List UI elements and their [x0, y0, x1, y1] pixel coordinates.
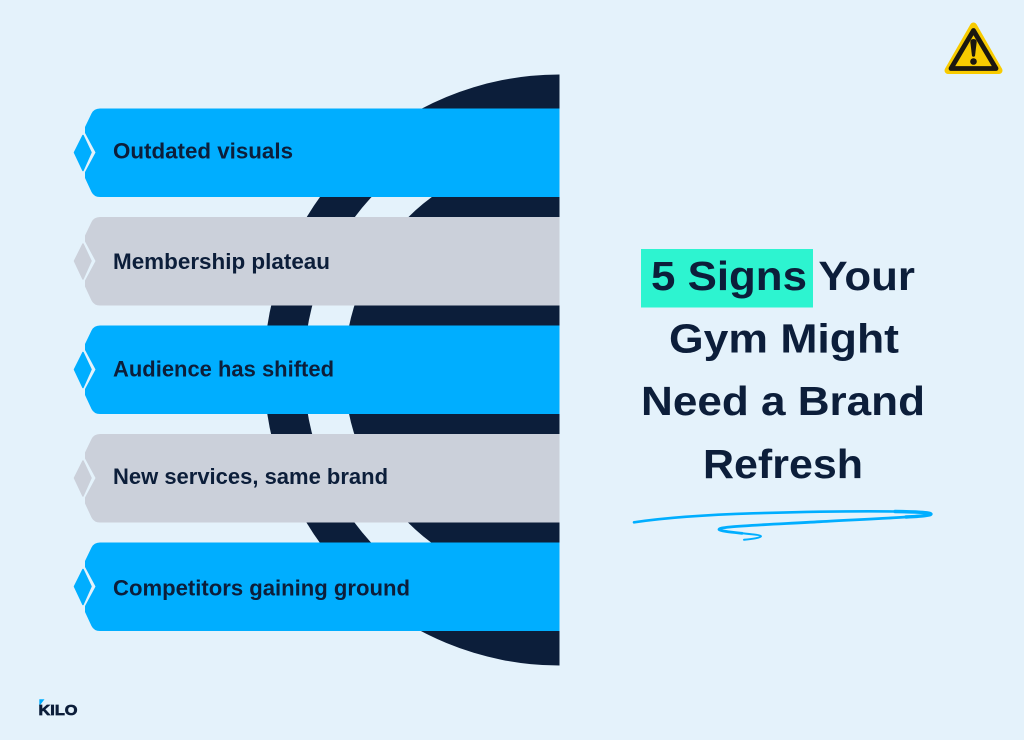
- sign 5: competitors gaining ground: [74, 542, 560, 631]
- title: 5 signs your gym might need a brand refresh: Refresh: [703, 441, 863, 487]
- sign 1: outdated visuals: [74, 108, 560, 197]
- sign 3: audience has shifted: [74, 326, 560, 414]
- sign 3: audience has shifted: Audience has shifted: [113, 356, 334, 382]
- title: 5 signs your gym might need a brand refresh: Gym Might: [669, 316, 899, 362]
- highlight behind 5 Signs: [641, 249, 813, 308]
- icon: warning triangle: [948, 26, 999, 70]
- sign 5: competitors gaining ground: Competitors gaining ground: [113, 576, 410, 600]
- sign 1: outdated visuals: Outdated visuals: [113, 138, 293, 164]
- title: 5 signs your gym might need a brand refresh: Need a Brand: [641, 378, 925, 424]
- sign 2: membership plateau: [74, 217, 560, 306]
- logo: KILO: KILO: [38, 702, 78, 719]
- sign 4: new services, same brand: [74, 434, 560, 522]
- title: 5 signs your gym might need a brand refresh: [641, 249, 925, 487]
- title: 5 signs your gym might need a brand refresh: 5 Signs Your: [651, 253, 915, 299]
- concentric semicircle graphic: [264, 74, 560, 666]
- sign 2: membership plateau: Membership plateau: [113, 249, 330, 274]
- hand-drawn underline squiggle: [634, 511, 931, 540]
- sign 4: new services, same brand: New services, same brand: [113, 464, 388, 489]
